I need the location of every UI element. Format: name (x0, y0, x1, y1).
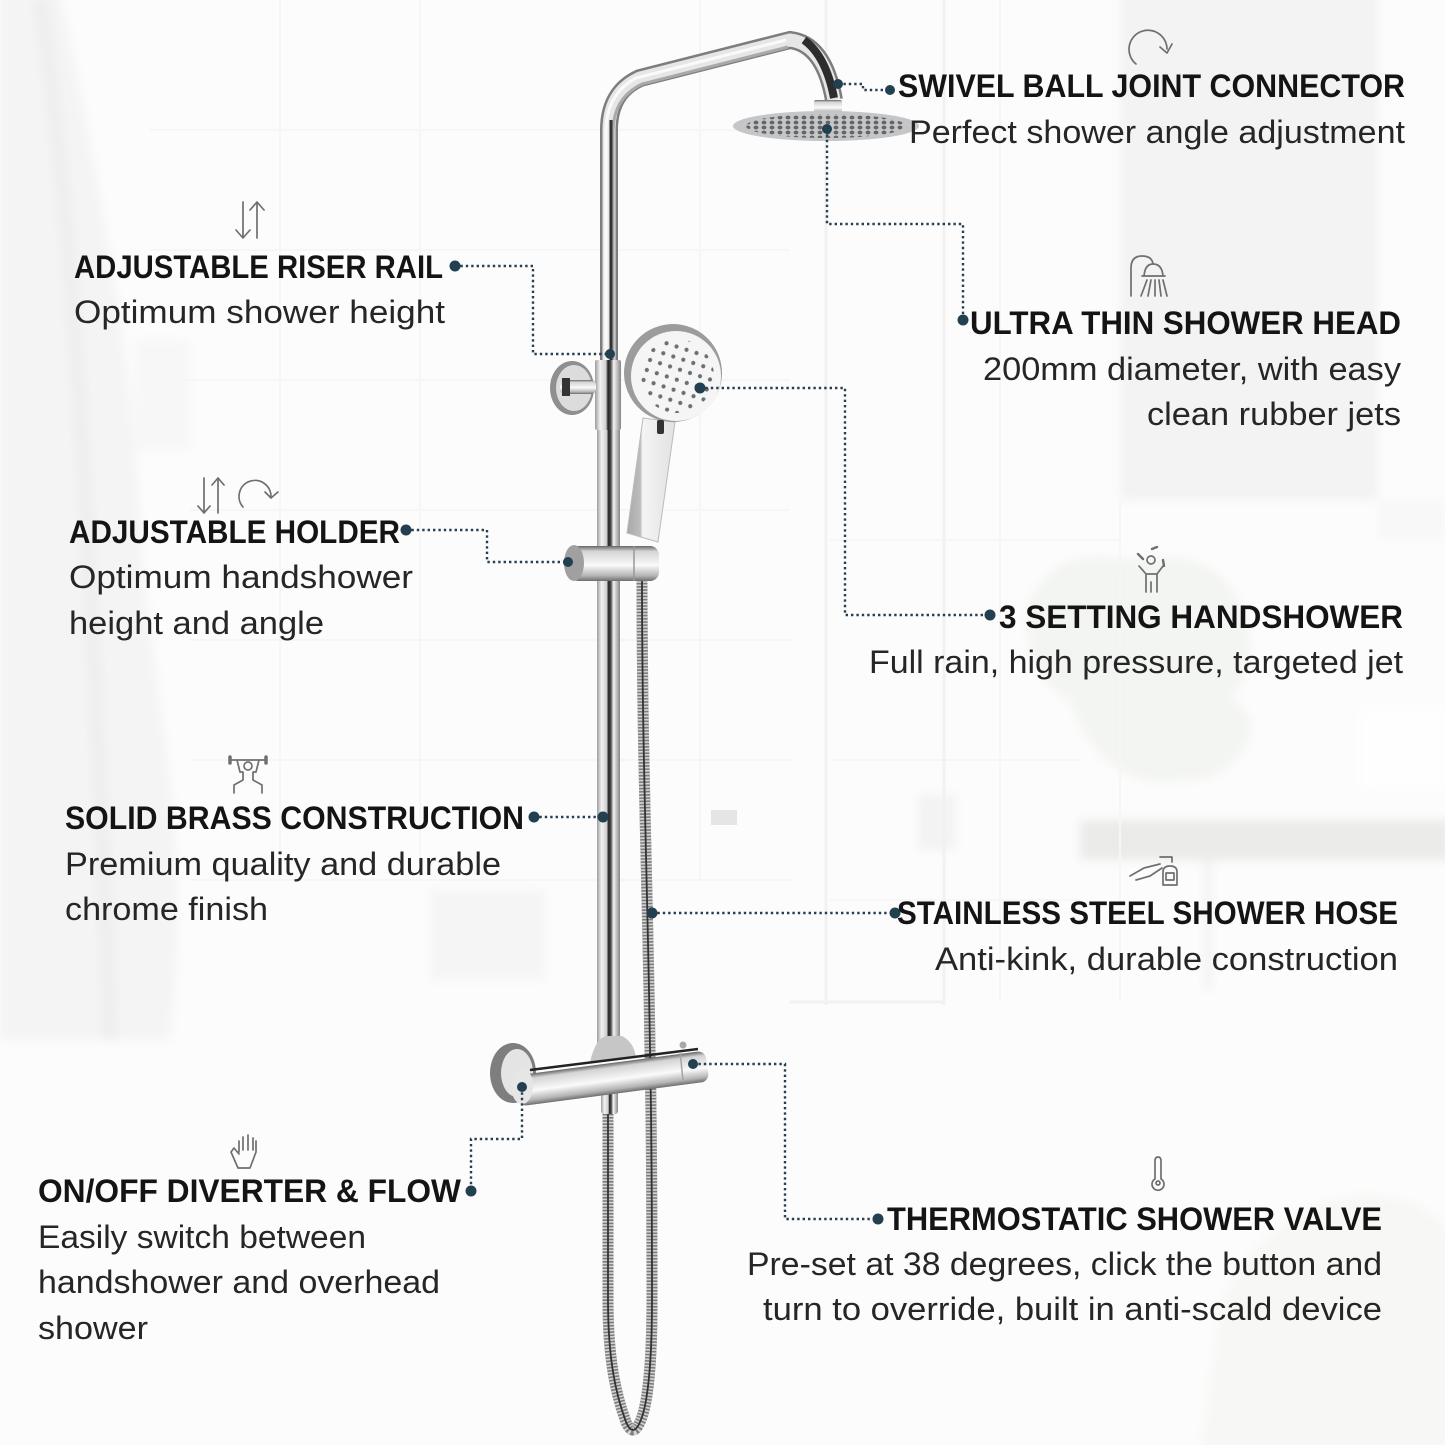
label: stainless steel shower hose: STAINLESS STEEL SHOWER HOSE (897, 895, 1398, 931)
handshower (624, 324, 722, 542)
icon: up down arrows (236, 202, 264, 238)
icon: up down and rotate arrows (198, 478, 278, 513)
label: thermostatic shower valve: turn to override, built in anti-scald device (763, 1291, 1382, 1327)
label: 3 setting handshower: Full rain, high pressure, targeted jet (869, 644, 1403, 680)
label: thermostatic shower valve: THERMOSTATIC SHOWER VALVE (887, 1201, 1382, 1237)
icon: shower (1131, 256, 1167, 296)
label: ultra thin shower head: clean rubber jets (1147, 396, 1401, 432)
label: thermostatic shower valve: Pre-set at 38 degrees, click the button and (747, 1246, 1382, 1282)
label: adjustable holder: ADJUSTABLE HOLDER (69, 514, 400, 550)
shower system illustration (490, 40, 919, 1430)
rail sleeve (595, 360, 621, 430)
label: on/off diverter and flow: ON/OFF DIVERTER & FLOW (38, 1173, 462, 1209)
leader: hose (646, 908, 900, 918)
icon: hand (231, 1135, 256, 1168)
label: ultra thin shower head: 200mm diameter, with easy (983, 351, 1401, 387)
label: solid brass construction: Premium quality and durable (65, 846, 501, 882)
label: stainless steel shower hose (897, 895, 1398, 977)
sliding holder (564, 545, 659, 581)
flexible hose (608, 578, 652, 1430)
riser rail (597, 428, 620, 1048)
label: solid brass construction: chrome finish (65, 891, 268, 927)
leader: valve (688, 1059, 884, 1224)
label: adjustable holder (69, 514, 413, 641)
icon: dumbbell lifter (230, 757, 266, 793)
icon: swivel arrow (1129, 30, 1172, 64)
leader: diverter (466, 1082, 527, 1196)
overhead arm (606, 40, 834, 360)
leader: solid brass (528, 812, 608, 822)
leader: riser rail (450, 260, 615, 359)
label: adjustable riser rail: ADJUSTABLE RISER RAIL (74, 249, 443, 285)
overhead shower head (733, 100, 919, 141)
leader: shower head (822, 124, 968, 326)
label: on/off diverter and flow: handshower and overhead (38, 1264, 440, 1300)
label: swivel ball joint connector (898, 68, 1405, 150)
icon: juggler (1138, 547, 1164, 592)
label: adjustable riser rail: Optimum shower height (74, 294, 445, 330)
leader: holder (400, 524, 573, 567)
label: 3 setting handshower (869, 599, 1403, 680)
label: adjustable holder: height and angle (69, 605, 324, 641)
thermostatic valve (490, 1036, 709, 1114)
label: adjustable riser rail (74, 249, 445, 330)
icon: thermometer (1152, 1157, 1164, 1190)
label: ultra thin shower head: ULTRA THIN SHOWER HEAD (970, 305, 1401, 341)
label: thermostatic shower valve (747, 1201, 1382, 1327)
label: ultra thin shower head (970, 305, 1401, 432)
label: swivel ball joint connector: Perfect shower angle adjustment (909, 114, 1405, 150)
label: on/off diverter and flow: Easily switch between (38, 1219, 366, 1255)
label: solid brass construction: SOLID BRASS CONSTRUCTION (65, 800, 524, 836)
label: on/off diverter and flow: shower (38, 1310, 148, 1346)
wall bracket (550, 361, 596, 415)
label: on/off diverter and flow (38, 1173, 462, 1346)
label: swivel ball joint connector: SWIVEL BALL JOINT CONNECTOR (898, 68, 1405, 104)
leader: handshower (694, 382, 996, 620)
label: stainless steel shower hose: Anti-kink, durable construction (935, 941, 1398, 977)
icon: hand with soap pump (1130, 857, 1177, 885)
label: adjustable holder: Optimum handshower (69, 559, 413, 595)
leader: swivel joint (833, 79, 895, 95)
label: 3 setting handshower: 3 SETTING HANDSHOWER (999, 599, 1403, 635)
label: solid brass construction (65, 800, 524, 927)
